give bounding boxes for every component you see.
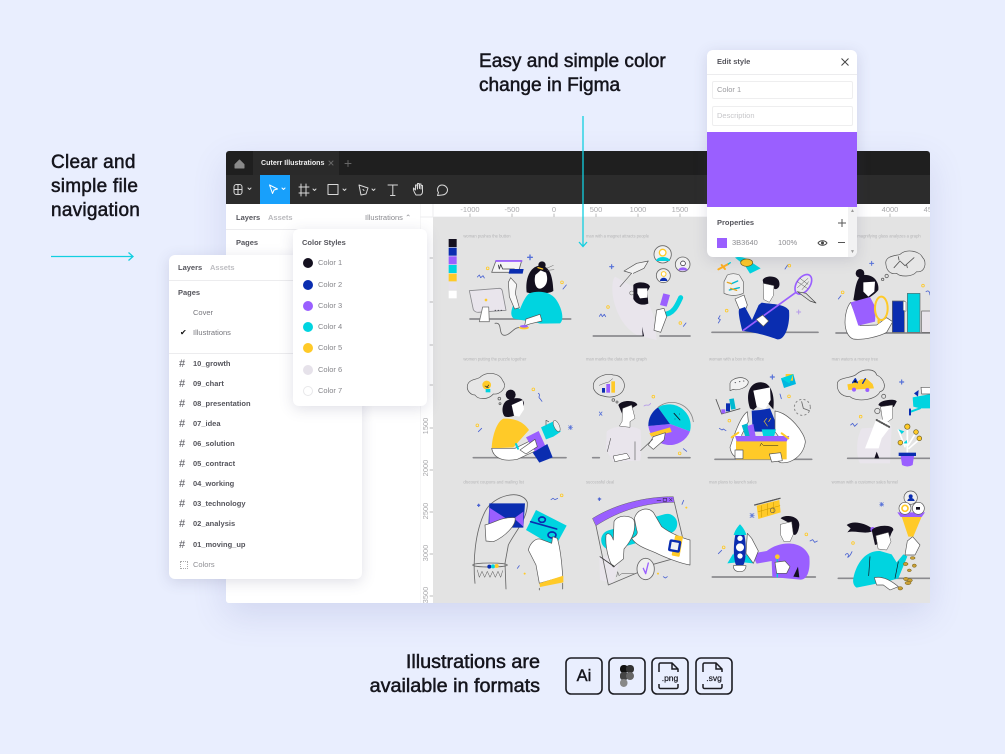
active tab: Cuterr Illustrations [261, 159, 324, 167]
frame list: # [179, 358, 185, 370]
heading: formats [370, 651, 540, 697]
illustration: woman pushes the button: woman pushes the button [463, 234, 511, 239]
color 4: Color 4 [318, 322, 342, 331]
pages label: Pages [178, 288, 200, 297]
icon: svg file [696, 658, 732, 694]
scrollbar [848, 207, 857, 257]
row 2 right illustrations [709, 357, 931, 466]
illustration: woman pushes the button [463, 234, 571, 335]
color 6 [303, 365, 342, 375]
illustration: man waters a money tree [832, 357, 931, 466]
frame list: 04_working [193, 479, 234, 488]
panel: color styles [293, 229, 427, 406]
illustration: woman with a box [709, 357, 812, 463]
frame list: # [179, 378, 185, 390]
layers panel header [226, 204, 420, 603]
frame list: # [179, 478, 185, 490]
illustration: successful deal [586, 479, 690, 585]
illustration: successful deal: successful deal [586, 479, 614, 484]
assets tab: Assets [268, 213, 293, 222]
frame list: # [179, 438, 185, 450]
illustration: man waters a money tree: man waters a money tree [832, 357, 879, 362]
panel heading: Color Styles [302, 238, 346, 247]
name input: Color 1 [717, 85, 741, 94]
name input [712, 81, 853, 99]
frame list: 09_chart [193, 379, 224, 388]
color 7: Color 7 [318, 386, 342, 395]
description input [712, 106, 853, 126]
frame list: 02_analysis [193, 519, 235, 528]
frame list: Colors [193, 560, 215, 569]
heading: color change: Easy and simple color [479, 51, 666, 72]
color 7 [303, 386, 342, 396]
frame list: # [179, 498, 185, 510]
heading: file navigation [51, 152, 140, 221]
illustration: coupons and mailing list [463, 479, 567, 590]
illustration: woman with magnifying glass [831, 234, 931, 339]
canvas and rulers [234, 160, 930, 603]
heading: formats: Illustrations are [406, 651, 540, 673]
page: cover: Cover [193, 308, 213, 317]
color 1 [303, 258, 342, 268]
page selector: Illustrations ⌃ [365, 213, 411, 222]
top ruler: 0 [552, 205, 556, 214]
frame list: # [179, 518, 185, 530]
left ruler [421, 258, 433, 603]
color 1: Color 1 [318, 258, 342, 267]
left ruler: 3000 [421, 545, 430, 561]
visibility icon [818, 240, 828, 246]
color 4 [303, 322, 342, 332]
panel: edit style [707, 50, 857, 257]
color 2 [303, 280, 342, 290]
row 3 right illustrations [709, 479, 930, 590]
illustration: woman with customer funnel [832, 479, 930, 590]
color preview [707, 132, 857, 207]
illustration: coupons and mailing list: discount coupons and mailing list [463, 479, 525, 484]
illustration: man catching with net [712, 257, 818, 339]
illustration grid [449, 234, 931, 590]
scrollbar: ▲ [850, 208, 855, 214]
move tool highlight [260, 175, 290, 204]
illustration: woman with magnifying glass: woman with a magnifying glass analyzes a graph [831, 234, 921, 239]
illustration: man plans to launch sales: man plans to launch sales [709, 479, 757, 484]
title bar [226, 151, 930, 175]
opacity value: 100% [778, 238, 797, 247]
top ruler: 4500 [924, 205, 940, 214]
frame list: 05_contract [193, 459, 235, 468]
figma app window [226, 151, 930, 603]
hex value: 3B3640 [732, 238, 758, 247]
illustration: women putting the puzzle together [463, 357, 573, 463]
top ruler: 500 [590, 205, 602, 214]
remove icon [838, 242, 845, 243]
panel: file navigation: ✔ [180, 328, 187, 337]
icon: Ai: Ai [577, 667, 591, 685]
layers tab: Layers [236, 213, 260, 222]
row 1 left: color swatches and two illustrations [449, 234, 690, 340]
frame list: # [179, 539, 185, 551]
description input: Description [717, 111, 755, 120]
toolbar [226, 175, 930, 204]
frame list: # [179, 418, 185, 430]
illustration: woman with customer funnel: woman with a customer sales funnel [832, 479, 898, 484]
left ruler: 1500 [421, 418, 430, 434]
top ruler: 1500 [672, 205, 688, 214]
frame list: # [179, 398, 185, 410]
illustration: man with a magnet: man with a magnet attracts people [586, 234, 650, 239]
heading: color change [479, 51, 666, 96]
color 3: Color 3 [318, 301, 342, 310]
page: illustrations: Illustrations [193, 328, 231, 337]
heading: formats: available in formats [370, 675, 540, 697]
heading: color change: change in Figma [479, 75, 620, 96]
toolbar icons [234, 160, 448, 196]
heading: file navigation: simple file [51, 176, 138, 197]
icon: svg file: .svg [706, 673, 722, 683]
frame list: 07_idea [193, 419, 221, 428]
icon: png file: .png [662, 673, 679, 683]
row 1 right illustrations [712, 234, 931, 339]
left ruler: 2500 [421, 503, 430, 519]
top ruler: -500 [504, 205, 520, 214]
illustration: man plans to launch sales [709, 479, 817, 580]
illustration: man with a magnet [586, 234, 690, 340]
color 2: Color 2 [318, 280, 342, 289]
color 6: Color 6 [318, 365, 342, 374]
icon: png file [652, 658, 688, 694]
color 3 [303, 301, 342, 311]
left ruler: 3500 [421, 587, 430, 603]
heading: file navigation: Clear and [51, 152, 136, 173]
illustration: women putting the puzzle together: women putting the puzzle together [463, 357, 527, 362]
panel title: Edit style [717, 57, 750, 66]
layers tab: Layers [178, 263, 202, 272]
illustration: man marks data on graph [586, 357, 693, 462]
frame list [179, 358, 251, 569]
active tab [253, 151, 339, 175]
frame list: # [179, 458, 185, 470]
scrollbar: ▼ [850, 249, 855, 255]
row 2 left illustrations [463, 357, 693, 463]
icon: Ai [566, 658, 602, 694]
panel: file navigation [169, 255, 362, 579]
illustration: man marks data on graph: man marks the data on the graph [586, 357, 647, 362]
color swatches [449, 239, 457, 298]
frame list: 10_growth [193, 359, 231, 368]
panel tabs [178, 263, 235, 272]
frame list: 03_technology [193, 499, 246, 508]
pages label: Pages [236, 238, 258, 247]
color 5: Color 5 [318, 343, 342, 352]
assets tab: Assets [210, 263, 235, 272]
icon: Figma [609, 658, 645, 694]
row 3 left illustrations [463, 479, 690, 590]
top ruler: -1000 [460, 205, 480, 214]
canvas background [433, 217, 930, 603]
frame list: 06_solution [193, 439, 235, 448]
top ruler: 4000 [882, 205, 898, 214]
color 5 [303, 343, 342, 353]
properties label: Properties [717, 218, 754, 227]
illustration: woman with a box: woman with a box in the office [709, 357, 765, 362]
close icon [841, 58, 849, 66]
top ruler [420, 204, 940, 603]
add icon [838, 219, 846, 227]
heading: file navigation: navigation [51, 200, 140, 221]
frame list: 08_presentation [193, 399, 251, 408]
top ruler: 1000 [630, 205, 646, 214]
left ruler: 2000 [421, 460, 430, 476]
frame list: 01_moving_up [193, 540, 246, 549]
fill swatch [717, 238, 727, 248]
